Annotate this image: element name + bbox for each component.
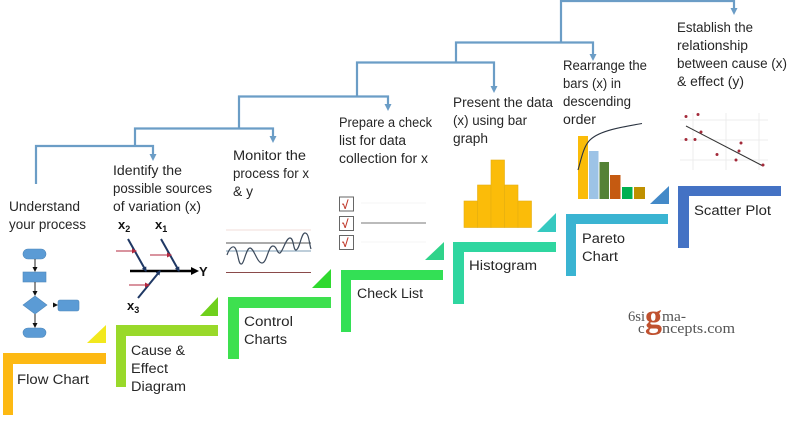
step 2 label: Diagram — [131, 379, 186, 394]
step 5 label: Histogram — [469, 258, 537, 273]
step 4 description: list for data — [339, 133, 406, 148]
chart: pareto bars and curve — [578, 124, 645, 199]
step 1 description: your process — [9, 217, 86, 232]
step 6 label: Pareto — [582, 231, 625, 246]
step 2 bracket — [116, 325, 218, 387]
step 3 label: Control — [244, 314, 293, 329]
step 1 description: Understand — [9, 199, 80, 214]
step 6 triangle — [650, 186, 669, 204]
step 4: check list — [339, 115, 444, 332]
logo: 6sigma-concepts.com: c — [638, 321, 645, 337]
step 6 label: Chart — [582, 249, 618, 264]
step 1: flow chart — [3, 199, 106, 415]
step 7 description: relationship — [677, 38, 748, 53]
icon: fishbone diagram: 2 — [125, 224, 130, 234]
step 5 description: (x) using bar — [453, 113, 527, 128]
step 5: histogram — [453, 95, 556, 304]
step 2 description: Identify the — [113, 163, 182, 178]
step 4 bracket — [341, 270, 443, 332]
step 5 description: Present the data — [453, 95, 553, 110]
step 1 triangle — [87, 325, 106, 343]
step 5 bracket — [453, 242, 556, 304]
step 4 triangle — [425, 242, 444, 260]
step 6 bracket — [566, 214, 668, 276]
step 6: pareto chart — [563, 58, 669, 276]
step 7 description: between cause (x) — [677, 56, 787, 71]
step 5 description: graph — [453, 131, 488, 146]
logo: 6sigma-concepts.com: 6si — [628, 309, 645, 325]
step 3 triangle — [312, 269, 331, 288]
step 3 description: & y — [233, 184, 253, 199]
step 4 label: Check List — [357, 286, 423, 301]
step 7 bracket — [678, 186, 781, 248]
icon: flow chart — [23, 249, 79, 338]
step 6 description: descending — [563, 94, 631, 109]
step 4 description: Prepare a check — [339, 115, 432, 130]
step 7: scatter plot — [677, 20, 787, 248]
step 3 label: Charts — [244, 332, 287, 347]
step 4 description: collection for x — [339, 151, 428, 166]
icon: fishbone diagram — [116, 217, 208, 315]
step 1 bracket — [3, 353, 106, 415]
step 2 label: Effect — [131, 361, 168, 376]
icon: fishbone diagram: 1 — [162, 224, 167, 234]
icon: fishbone diagram: x — [118, 217, 125, 232]
icon: check boxes: √ — [342, 198, 349, 212]
chart: histogram bars — [464, 160, 532, 228]
step 7 description: & effect (y) — [677, 74, 744, 89]
icon: fishbone diagram: Y — [199, 264, 208, 279]
step 7 description: Establish the — [677, 20, 753, 35]
step 7 label: Scatter Plot — [694, 203, 771, 218]
step 3 description: Monitor the — [233, 148, 306, 163]
step 3 bracket — [228, 297, 331, 359]
step 6 description: bars (x) in — [563, 76, 621, 91]
step 2 description: possible sources — [113, 181, 212, 196]
connectors between steps — [36, 1, 734, 184]
chart: control chart — [226, 230, 311, 272]
icon: fishbone diagram: x — [127, 298, 134, 313]
icon: check boxes — [340, 197, 426, 250]
logo: 6sigma-concepts.com: ma- — [662, 309, 686, 325]
logo: 6sigma-concepts.com: g — [645, 299, 662, 336]
step 6 description: Rearrange the — [563, 58, 647, 73]
logo: 6sigma-concepts.com: ncepts.com — [662, 321, 735, 337]
step 2 triangle — [200, 297, 218, 316]
step 3: control charts — [226, 148, 331, 359]
step 2 description: of variation (x) — [113, 199, 201, 214]
step 1 label: Flow Chart — [17, 372, 89, 387]
step 3 description: process for x — [233, 166, 309, 181]
icon: fishbone diagram: 3 — [134, 305, 139, 315]
icon: check boxes: √ — [342, 236, 349, 250]
step 2 label: Cause & — [131, 343, 185, 358]
step 2: cause and effect diagram — [113, 163, 218, 394]
step 6 description: order — [563, 112, 597, 127]
chart: scatter plot — [680, 113, 768, 170]
step 5 triangle — [537, 213, 556, 232]
logo: 6sigma-concepts.com — [628, 299, 735, 337]
icon: fishbone diagram: x — [155, 217, 162, 232]
icon: check boxes: √ — [342, 217, 349, 231]
